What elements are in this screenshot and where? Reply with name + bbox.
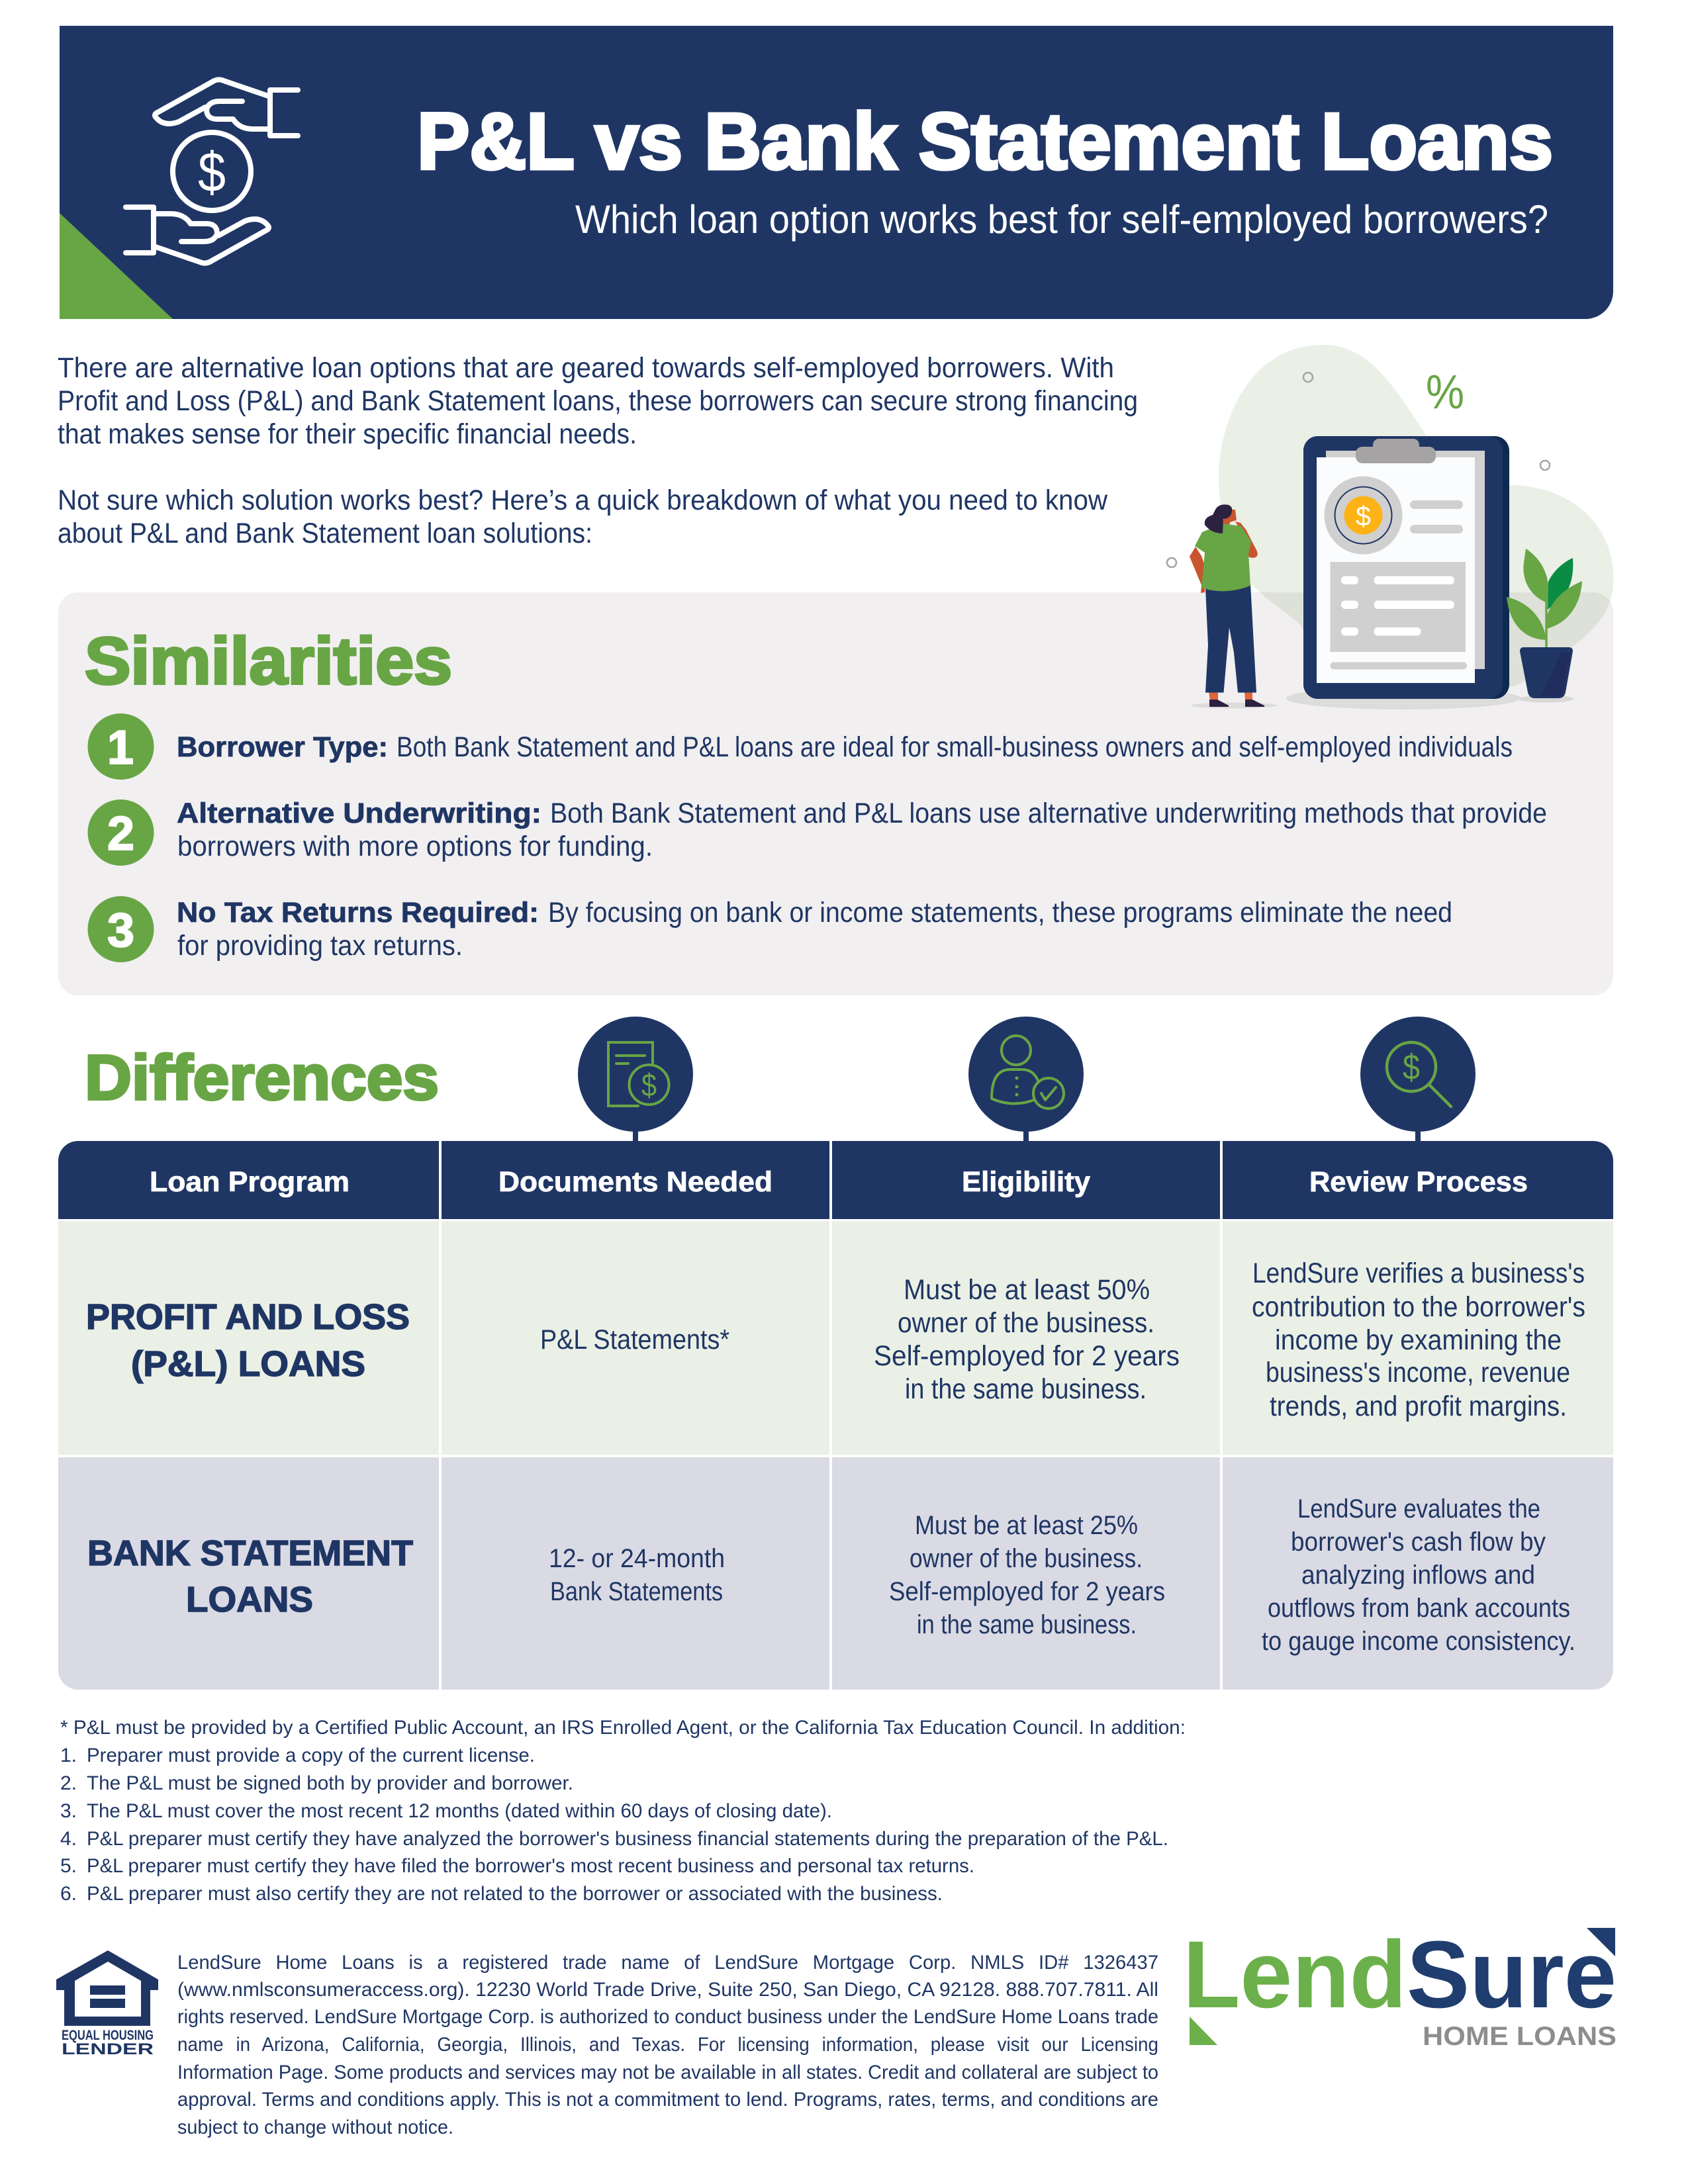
legal disclaimer: name in Arizona, California, Georgia, Illinois, and Texas. For licensing information, please visit our Licensing — [177, 2034, 1158, 2056]
item 1: 1 — [107, 721, 134, 774]
item 1: Borrower Type: — [177, 731, 388, 763]
item 2: 2 — [107, 807, 134, 860]
row: bank statement: borrower's cash flow by — [1291, 1527, 1546, 1557]
intro text: that makes sense for their specific financial needs. — [58, 418, 637, 450]
item 3 — [87, 896, 1452, 962]
table header row: Review Process — [1309, 1166, 1528, 1198]
logo: lendsure home loans — [1183, 1921, 1617, 2051]
item 3: By focusing on bank or income statements, these programs eliminate the need — [548, 897, 1452, 929]
row: profit and loss: Must be at least 50% — [904, 1274, 1150, 1306]
intro text: Profit and Loss (P&L) and Bank Statement loans, these borrowers can secure strong financing — [58, 385, 1138, 417]
row: profit and loss: trends, and profit margins. — [1270, 1390, 1567, 1422]
icon: document with dollar: $ — [641, 1068, 657, 1103]
item 2: Alternative Underwriting: — [177, 797, 541, 829]
row: profit and loss: (P&L) LOANS — [131, 1344, 365, 1384]
item 2: Both Bank Statement and P&L loans use alternative underwriting methods that provide — [550, 797, 1547, 829]
footnotes: 1. — [60, 1745, 77, 1766]
item 2: borrowers with more options for funding. — [177, 831, 653, 862]
item 2 — [87, 797, 1547, 866]
row: bank statement: analyzing inflows and — [1301, 1561, 1535, 1590]
icon: magnifier with dollar — [1360, 1017, 1476, 1145]
row: bank statement: BANK STATEMENT — [87, 1533, 413, 1573]
heading: similarities: Similarities — [85, 624, 452, 698]
row: bank statement: Self-employed for 2 years — [889, 1577, 1165, 1606]
footnotes: 5. — [60, 1855, 77, 1877]
footnotes: 4. — [60, 1828, 77, 1850]
icon: equal housing lender — [56, 1950, 158, 2058]
plant — [1507, 549, 1582, 703]
row: profit and loss: contribution to the borrower's — [1252, 1291, 1585, 1323]
icon: hands holding dollar coin — [126, 79, 298, 263]
subtitle: Which loan option works best for self-employed borrowers? — [575, 197, 1548, 242]
footnotes: Preparer must provide a copy of the current license. — [87, 1745, 535, 1766]
intro text: about P&L and Bank Statement loan solutions: — [58, 518, 592, 549]
logo: lendsure home loans: Sure — [1407, 1921, 1617, 2028]
title: P&L vs Bank Statement Loans — [417, 96, 1553, 186]
row: profit and loss: business's income, revenue — [1266, 1357, 1570, 1388]
clipboard: $ — [1356, 500, 1371, 531]
row: profit and loss: PROFIT AND LOSS — [86, 1297, 410, 1337]
percent sign: % — [1426, 366, 1464, 419]
footnotes: The P&L must be signed both by provider and borrower. — [87, 1772, 573, 1794]
row: profit and loss: Self-employed for 2 years — [874, 1340, 1180, 1372]
footnotes: 2. — [60, 1772, 77, 1794]
row: bank statement: owner of the business. — [910, 1544, 1143, 1573]
footnotes: * P&L must be provided by a Certified Public Account, an IRS Enrolled Agent, or the California Tax Education Council. In addition: — [60, 1717, 1186, 1739]
intro text — [58, 352, 1138, 549]
footnotes: 6. — [60, 1883, 77, 1905]
header banner — [60, 26, 1613, 319]
icon: person with check — [968, 1017, 1084, 1145]
icon: document with dollar — [578, 1017, 693, 1145]
row: profit and loss: in the same business. — [905, 1373, 1147, 1405]
footnotes: P&L preparer must certify they have analyzed the borrower's business financial statements during the preparation of the P&L. — [87, 1828, 1168, 1850]
legal disclaimer: approval. Terms and conditions apply. This is not a commitment to lend. Programs, rates, terms, and conditions are — [177, 2089, 1158, 2111]
comparison table — [58, 1141, 1613, 1690]
item 1: Both Bank Statement and P&L loans are ideal for small-business owners and self-employed individuals — [397, 731, 1513, 763]
legal disclaimer — [177, 1952, 1158, 2138]
row: bank statement: in the same business. — [917, 1610, 1137, 1639]
footnotes: 3. — [60, 1800, 77, 1822]
row: profit and loss — [58, 1221, 1613, 1455]
footnotes: P&L preparer must certify they have filed the borrower's most recent business and personal tax returns. — [87, 1855, 974, 1877]
row: profit and loss: owner of the business. — [898, 1307, 1154, 1339]
legal disclaimer: rights reserved. LendSure Mortgage Corp. is authorized to conduct business under the LendSure Home Loans trade — [177, 2006, 1158, 2028]
table header row — [58, 1141, 1613, 1219]
row: bank statement: 12- or 24-month — [549, 1544, 725, 1573]
row: profit and loss: LendSure verifies a business's — [1252, 1257, 1585, 1289]
footnotes — [60, 1717, 1186, 1905]
icon: equal housing lender: LENDER — [62, 2040, 154, 2058]
item 3: No Tax Returns Required: — [177, 897, 539, 929]
legal disclaimer: Information Page. Some products and services may not be available in all states. Credit and collateral are subject to — [177, 2062, 1158, 2083]
item 3: 3 — [107, 904, 134, 957]
icon: magnifier with dollar: $ — [1403, 1048, 1420, 1087]
row: bank statement: outflows from bank accounts — [1268, 1594, 1570, 1623]
woman — [1190, 504, 1277, 708]
icon: equal housing lender: EQUAL HOUSING — [62, 2028, 154, 2043]
item 1 — [87, 713, 1513, 780]
row: bank statement: Must be at least 25% — [915, 1511, 1138, 1540]
legal disclaimer: LendSure Home Loans is a registered trade name of LendSure Mortgage Corp. NMLS ID# 1326437 — [177, 1952, 1158, 1974]
heading: differences: Differences — [85, 1042, 439, 1113]
row: bank statement: LOANS — [186, 1580, 313, 1619]
footnotes: P&L preparer must also certify they are not related to the borrower or associated with the business. — [87, 1883, 943, 1905]
row: bank statement: Bank Statements — [550, 1577, 723, 1606]
panel: similarities — [58, 592, 1613, 995]
header banner: $ — [198, 141, 226, 203]
table header row: Eligibility — [962, 1166, 1090, 1198]
item 3: for providing tax returns. — [177, 930, 463, 962]
intro text: Not sure which solution works best? Here’s a quick breakdown of what you need to know — [58, 484, 1108, 516]
decorative circles — [1167, 373, 1550, 567]
row: profit and loss: P&L Statements* — [540, 1324, 729, 1355]
logo: lendsure home loans: HOME LOANS — [1423, 2022, 1617, 2051]
footnotes: The P&L must cover the most recent 12 months (dated within 60 days of closing date). — [87, 1800, 832, 1822]
row: bank statement: to gauge income consistency. — [1262, 1627, 1575, 1656]
table header row: Documents Needed — [498, 1166, 773, 1198]
row: bank statement: LendSure evaluates the — [1297, 1494, 1540, 1524]
row: bank statement — [58, 1457, 1613, 1690]
table header row: Loan Program — [150, 1166, 350, 1198]
logo: lendsure home loans: Lend — [1183, 1921, 1407, 2028]
row: profit and loss: income by examining the — [1275, 1324, 1562, 1356]
intro text: There are alternative loan options that are geared towards self-employed borrowers. With — [58, 352, 1114, 384]
clipboard — [1286, 436, 1521, 709]
legal disclaimer: subject to change without notice. — [177, 2116, 453, 2138]
illustration: woman viewing clipboard with plant — [1167, 345, 1614, 709]
legal disclaimer: (www.nmlsconsumeraccess.org). 12230 World Trade Drive, Suite 250, San Diego, CA 92128. 888.707.7811. All — [177, 1979, 1158, 2001]
